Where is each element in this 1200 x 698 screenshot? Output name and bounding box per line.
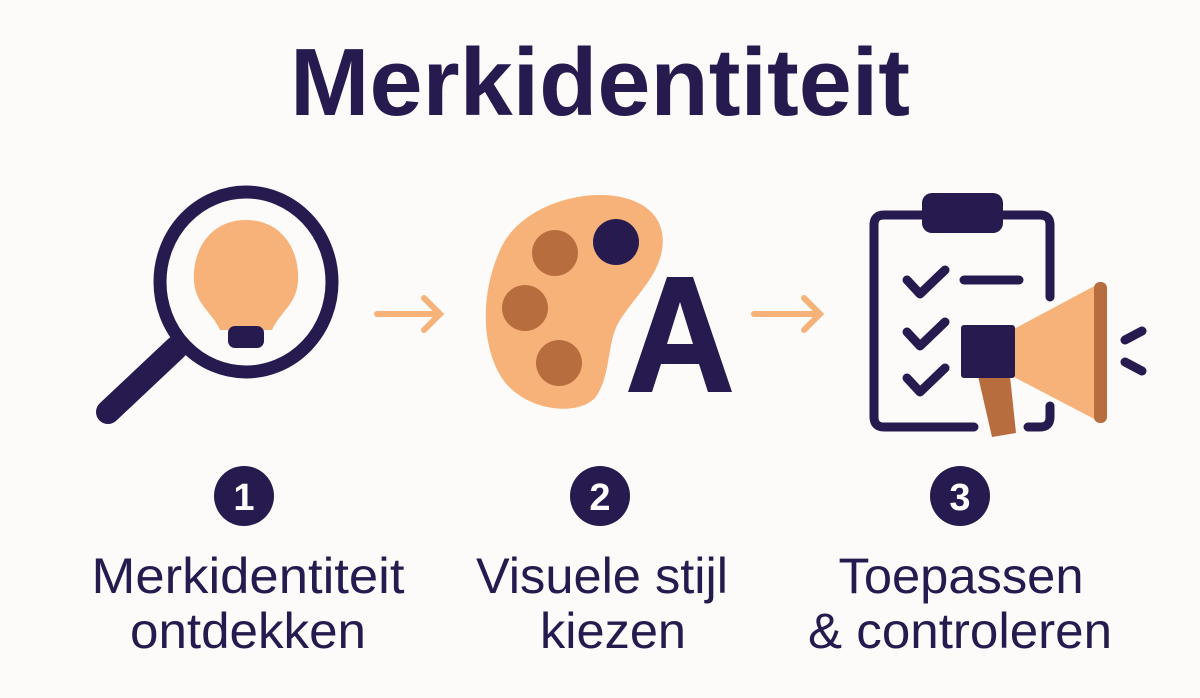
- label 3: [808, 548, 1112, 659]
- label 1: ontdekken: [130, 603, 366, 659]
- step 1 badge: 1: [233, 477, 255, 519]
- label 1: [92, 548, 405, 659]
- icon: magnifier with lightbulb: [108, 192, 332, 412]
- step 3 badge: 3: [949, 477, 971, 519]
- icon: clipboard with megaphone: [874, 193, 1142, 437]
- step 2 badge: 2: [589, 477, 611, 519]
- label 1: Merkidentiteit: [92, 548, 405, 604]
- title: Merkidentiteit: [290, 29, 910, 136]
- arrow 1: [377, 298, 440, 330]
- label 2: Visuele stijl: [476, 548, 728, 604]
- label 3: & controleren: [808, 603, 1112, 659]
- step 1 badge: [214, 466, 274, 526]
- label 2: [476, 548, 728, 659]
- label 2: kiezen: [540, 603, 686, 659]
- icon: palette with letter A: [486, 195, 732, 409]
- label 3: Toepassen: [838, 548, 1084, 604]
- arrow 2: [754, 298, 820, 330]
- step 3 badge: [930, 466, 990, 526]
- step 2 badge: [570, 466, 630, 526]
